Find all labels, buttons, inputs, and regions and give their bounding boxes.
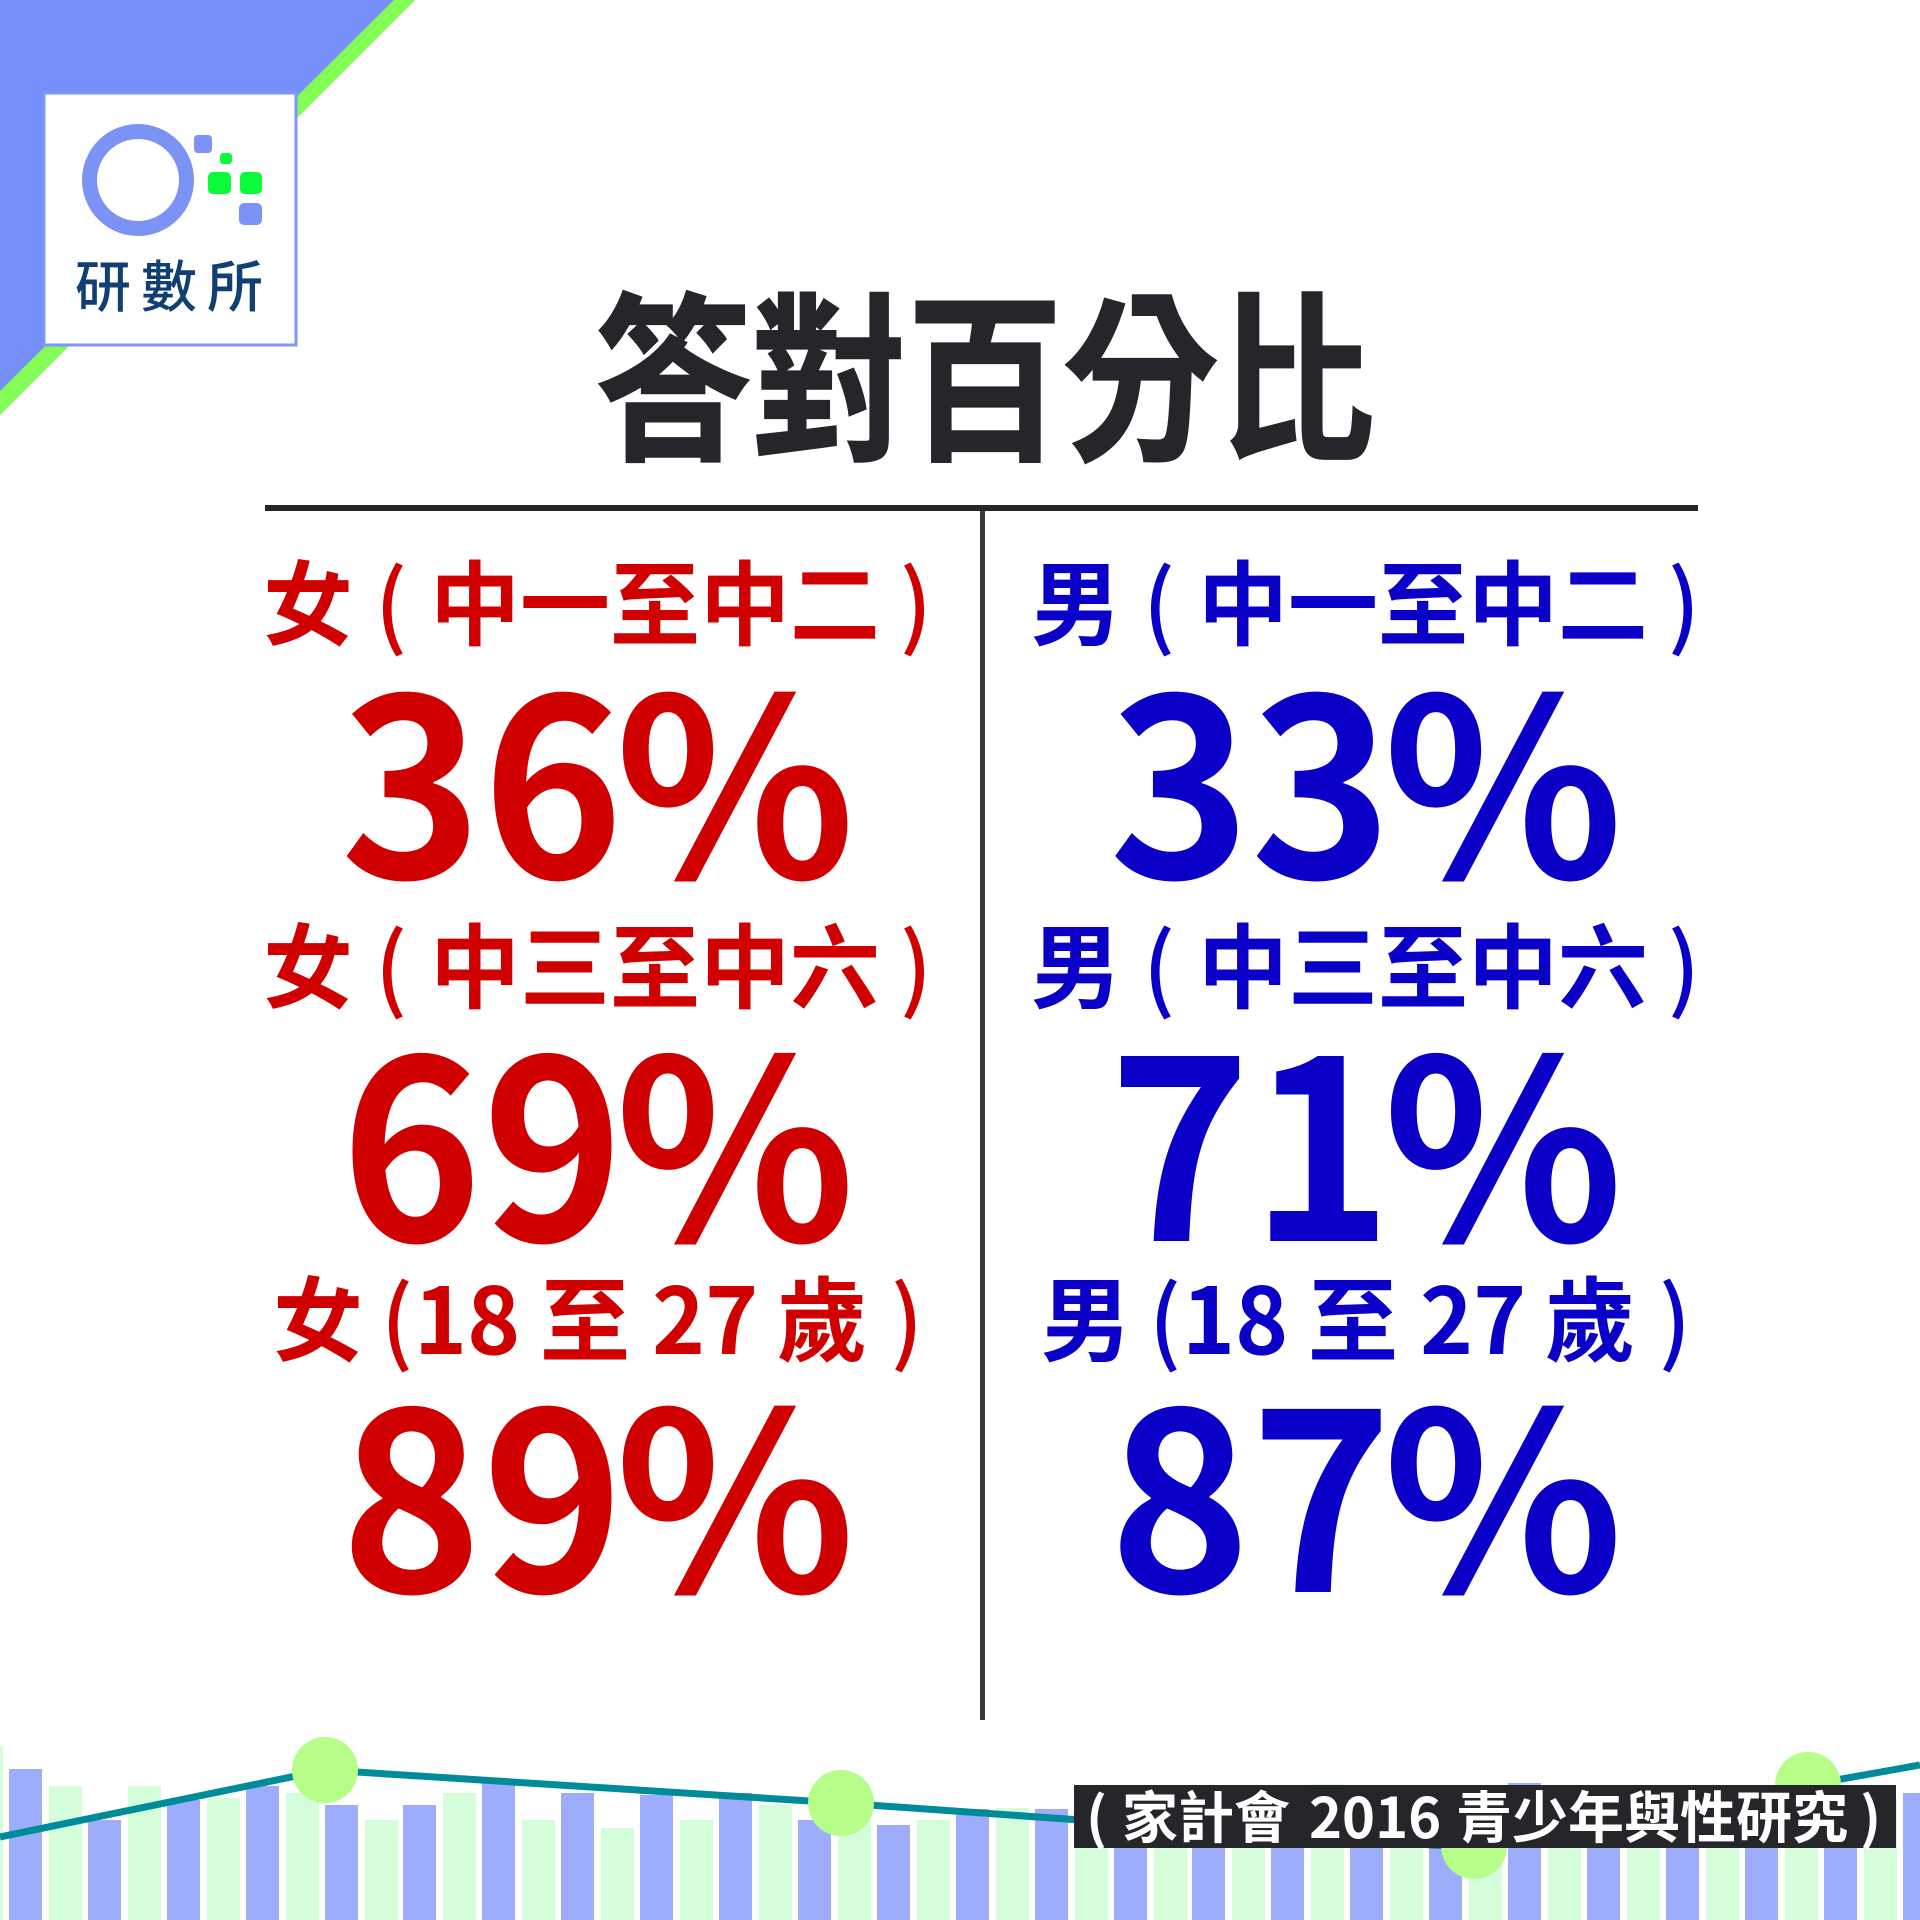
value: 89%: % [615,1305,855,1664]
label: female ages 18 to 27: ) [891,1249,923,1381]
label: female senior forms: 女 [263,896,353,1028]
value: 87%: % [1383,1305,1623,1664]
value: 89% [340,1305,855,1664]
label: male ages 18 to 27: 18 [1182,1249,1288,1381]
value: 69% [340,951,855,1313]
value: 33%: % [1383,591,1623,950]
label: female ages 18 to 27: 27 [652,1249,758,1381]
label: male senior forms: 中三至中六 [1198,896,1648,1028]
trend markers [292,1737,1841,1879]
value: 36%: % [615,591,855,950]
value: 33% [1109,591,1623,950]
value: 33%: 33 [1109,592,1392,950]
label: female ages 18 to 27: ( [381,1249,413,1381]
label: female junior forms: 女 [263,533,353,665]
label: male ages 18 to 27: 男 [1041,1249,1131,1381]
panel: male results [1031,533,1700,1664]
source caption: 家計會 [1122,1774,1290,1855]
label: female junior forms: ( [375,533,407,665]
label: male senior forms: ) [1668,896,1700,1028]
value: 87% [1109,1305,1623,1664]
label: male ages 18 to 27: 歲 [1545,1249,1635,1381]
source caption: ( [1086,1774,1107,1855]
label: male junior forms: ( [1143,533,1175,665]
label: male ages 18 to 27: 至 [1308,1249,1398,1381]
label: male ages 18 to 27: ( [1149,1249,1181,1381]
bar chart decoration [0,1747,1920,1920]
source caption [1074,1774,1896,1855]
label: female ages 18 to 27: 女 [273,1249,363,1381]
label: male junior forms: ) [1668,533,1700,665]
label: female junior forms: 中一至中二 [430,533,880,665]
label: female junior forms: ) [900,533,932,665]
value: 71%: % [1383,951,1623,1313]
label: male junior forms: 男 [1031,533,1121,665]
value: 71%: 71 [1109,951,1392,1313]
source caption: ) [1860,1774,1881,1855]
value: 71% [1109,951,1623,1313]
value: 36% [340,591,855,950]
label: female senior forms: ( [375,896,407,1028]
panel: female results [263,533,932,1664]
label: female senior forms: ) [900,896,932,1028]
label: female senior forms: 中三至中六 [430,896,880,1028]
label: female ages 18 to 27: 至 [540,1249,630,1381]
value: 69%: % [615,951,855,1313]
horizontal divider [265,505,1698,511]
source caption: 青少年與性研究 [1456,1774,1848,1855]
label: male ages 18 to 27: 27 [1420,1249,1526,1381]
label: male senior forms: 男 [1031,896,1121,1028]
source caption: 2016 [1309,1774,1441,1855]
corner banner [0,0,415,415]
title: 答對百分比 [595,236,1375,498]
logo: 研數所: 數 [141,243,197,324]
label: female ages 18 to 27: 18 [414,1249,520,1381]
label: male senior forms: ( [1143,896,1175,1028]
logo: 研數所 [44,93,296,345]
logo: 研數所: 研 [75,243,131,324]
logo: 研數所: 所 [207,243,263,324]
value: 87%: 87 [1109,1306,1392,1664]
value: 69%: 69 [340,951,624,1313]
label: male junior forms: 中一至中二 [1198,533,1648,665]
trend line [0,1765,1920,1848]
label: male ages 18 to 27: ) [1659,1249,1691,1381]
vertical divider [980,511,985,1720]
value: 36%: 36 [340,592,624,950]
label: female ages 18 to 27: 歲 [777,1249,867,1381]
value: 89%: 89 [340,1306,624,1664]
